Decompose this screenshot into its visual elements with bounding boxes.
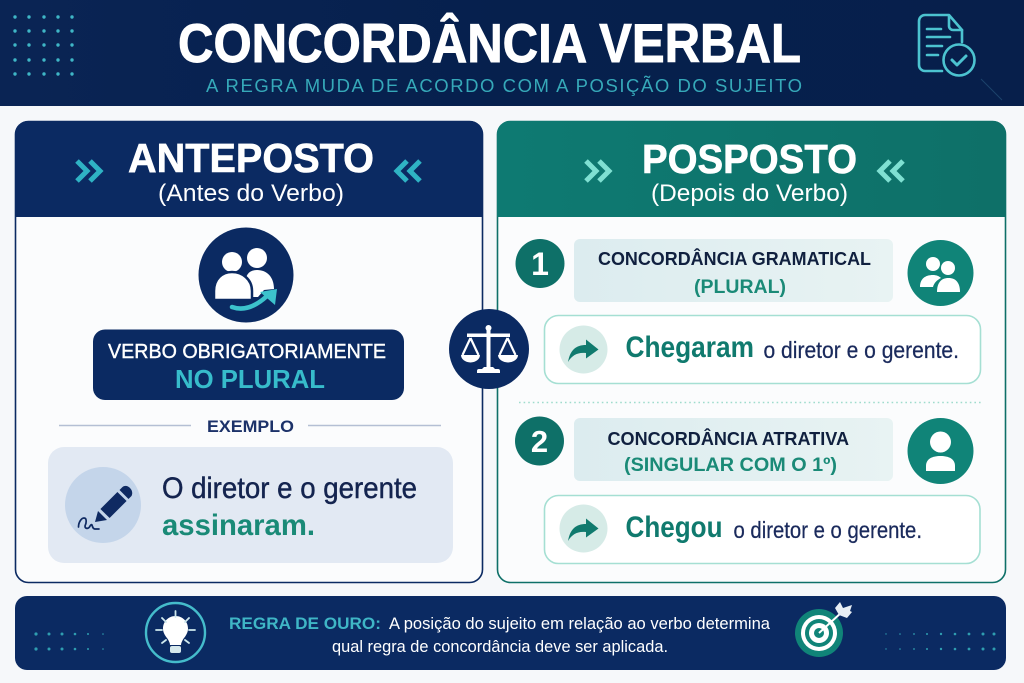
example sentence <box>626 331 959 364</box>
rule 1 label: CONCORDÂNCIA GRAMATICAL <box>598 248 871 269</box>
exemplo label: EXEMPLO <box>207 417 294 436</box>
rule 1 label: (PLURAL) <box>694 277 786 298</box>
rule 1 label <box>574 239 893 302</box>
example card <box>48 447 453 563</box>
example card 1 <box>544 316 980 384</box>
callout: verbo no plural <box>93 330 404 400</box>
example sentence: o diretor e o gerente. <box>734 517 922 543</box>
icon: arrow <box>560 504 608 552</box>
header banner <box>0 0 1024 106</box>
example sentence: assinaram. <box>162 509 315 542</box>
panel: posposto <box>497 121 1006 582</box>
icon: chevrons right-pointing <box>77 161 100 181</box>
panel heading: ANTEPOSTO <box>128 135 374 181</box>
dotted divider <box>519 402 982 404</box>
icon: pen signing <box>65 467 141 543</box>
golden rule text: qual regra de concordância deve ser aplicada. <box>332 637 668 656</box>
rule 2 label: CONCORDÂNCIA ATRATIVA <box>608 428 849 449</box>
icon: people with arrow <box>198 228 294 322</box>
rule 2 label: (SINGULAR COM O 1º) <box>624 455 837 476</box>
rule 1 number badge <box>516 239 564 288</box>
icon: scales of justice <box>449 309 529 389</box>
rule 2 number badge <box>515 416 564 466</box>
example sentence: O diretor e o gerente <box>162 472 417 505</box>
example card 2 <box>544 496 980 564</box>
footer dots left <box>34 632 104 651</box>
icon: document with check <box>919 15 974 76</box>
icon: one person <box>908 418 974 484</box>
footer dots right <box>885 632 996 650</box>
panel heading: POSPOSTO <box>642 136 857 182</box>
icon: arrow <box>560 326 608 374</box>
icon: chevrons left-pointing <box>880 161 903 181</box>
golden rule text <box>229 614 771 656</box>
panel subheading: (Antes do Verbo) <box>158 180 344 207</box>
icon: target with arrow <box>795 602 852 657</box>
golden rule text: A posição do sujeito em relação ao verbo determina <box>389 614 771 633</box>
decorative dot grid <box>13 15 74 76</box>
example sentence: o diretor e o gerente. <box>764 337 959 363</box>
example sentence <box>626 511 922 544</box>
icon: chevrons right-pointing <box>586 161 609 181</box>
title: CONCORDÂNCIA VERBAL <box>178 12 801 74</box>
rule 2 number badge: 2 <box>531 424 548 459</box>
callout: verbo no plural: NO PLURAL <box>175 364 325 394</box>
panel: anteposto <box>15 121 483 582</box>
example sentence: Chegou <box>626 511 722 544</box>
subtitle: A REGRA MUDA DE ACORDO COM A POSIÇÃO DO SUJEITO <box>206 75 802 96</box>
icon: two people <box>908 240 974 306</box>
icon: light bulb <box>146 603 205 662</box>
example sentence: Chegaram <box>626 331 754 364</box>
example sentence <box>162 472 417 542</box>
golden rule text: REGRA DE OURO: <box>229 614 381 633</box>
rule 1 number badge: 1 <box>531 246 549 282</box>
panel subheading: (Depois do Verbo) <box>651 180 848 207</box>
footer banner <box>15 596 1006 670</box>
callout: verbo no plural: VERBO OBRIGATORIAMENTE <box>108 340 386 363</box>
icon: chevrons left-pointing <box>397 161 420 181</box>
rule 2 label <box>574 418 893 481</box>
